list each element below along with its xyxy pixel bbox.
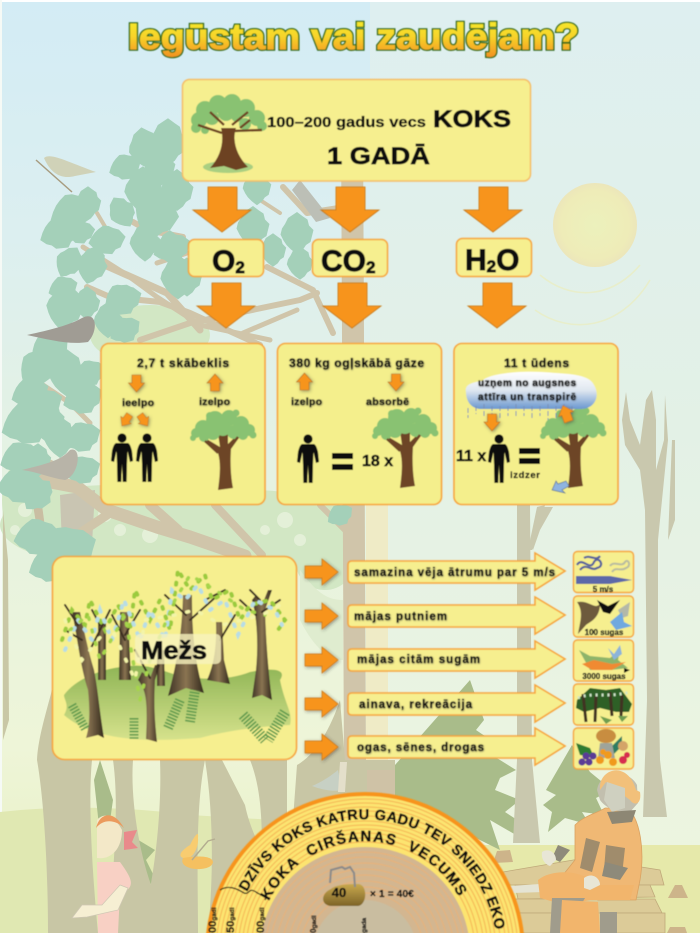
label: izelpo: izelpo xyxy=(291,396,322,408)
title: Iegūstam vai zaudējam? xyxy=(128,16,579,57)
icon: large oak tree xyxy=(191,94,267,173)
panel: water xyxy=(454,344,618,504)
birds xyxy=(22,156,96,480)
label: ieelpo: ieelpo xyxy=(122,397,154,409)
benefit arrow: forest goods: ogas, sēnes, drogas xyxy=(357,742,484,754)
panel: water: attīra un transpirē xyxy=(478,392,576,403)
age labels: 0gadi xyxy=(309,915,318,933)
tree ring diagram xyxy=(205,791,524,933)
label: Mežs xyxy=(135,634,221,665)
nuthatch xyxy=(312,770,339,791)
arrows: gases to panels xyxy=(197,283,526,328)
benefit arrow: forest goods xyxy=(348,728,565,765)
text: KOKS: KOKS xyxy=(433,106,511,133)
icon: blue arrow xyxy=(552,481,569,493)
benefit arrow: birds xyxy=(348,597,565,634)
leaves xyxy=(0,118,358,589)
back trunks forest bottom xyxy=(37,690,395,933)
right thin trunks xyxy=(513,390,675,843)
arrows: forest to benefits xyxy=(305,559,338,760)
icon: purse xyxy=(323,867,365,906)
panel: forest xyxy=(52,556,296,760)
icon: purse: 40 xyxy=(332,885,346,900)
icon box: forest goods xyxy=(574,728,634,769)
icon box: species: 3000 sugas xyxy=(582,672,626,681)
label: izdzer: izdzer xyxy=(510,470,540,481)
formula: O2: 2 xyxy=(235,258,245,277)
formula: CO2 xyxy=(312,240,388,278)
label: absorbē: absorbē xyxy=(366,396,409,408)
icon: person xyxy=(297,434,319,483)
icon: tree xyxy=(372,408,438,488)
age labels xyxy=(207,907,368,933)
age labels: 00gadi xyxy=(207,907,219,933)
formula: H2O: 2 xyxy=(487,257,496,276)
wavy marker xyxy=(220,887,266,900)
butterfly xyxy=(180,834,215,869)
leaves xyxy=(62,570,285,700)
icon box: wind: 5 m/s xyxy=(593,585,614,594)
benefit arrow: wind xyxy=(348,553,565,590)
formula: O2 xyxy=(188,240,264,278)
label: 11 x: 11 x xyxy=(456,448,486,465)
distant leaf canopy xyxy=(0,305,360,590)
text: tree age: 100–200 gadus vecs xyxy=(267,114,426,131)
text: oxygen amount: 2,7 t skābeklis xyxy=(137,356,229,370)
icon box: birds: 100 sugas xyxy=(585,628,624,637)
girl xyxy=(72,815,138,933)
formula: H2O xyxy=(456,238,532,277)
text: calculation: × 1 = 40€ xyxy=(370,889,414,900)
forester on logs xyxy=(493,770,688,933)
sun xyxy=(535,183,650,325)
benefit arrow: species: mājas citām sugām xyxy=(357,654,480,666)
formula: CO2: 2 xyxy=(366,258,375,277)
text: inner arc: KOKA CIRŠANAS VECUMS xyxy=(260,829,467,901)
benefit arrow: wind: samazina vēja ātrumu par 5 m/s xyxy=(354,567,555,579)
age labels: gada xyxy=(361,917,368,933)
icon: cloud with rain xyxy=(466,372,597,420)
benefit arrow: species xyxy=(348,641,565,678)
age labels: 00gadi xyxy=(255,907,267,933)
label: izelpo: izelpo xyxy=(199,396,230,408)
trees xyxy=(72,590,272,742)
panel: oxygen xyxy=(101,344,265,504)
equals xyxy=(519,448,540,464)
ferns xyxy=(72,690,285,740)
text: cloud caption: uzņem no augsnes xyxy=(478,378,576,389)
benefit arrow: birds: mājas putniem xyxy=(354,611,447,623)
text: CO2 amount: 380 kg ogļskābā gāze xyxy=(289,356,424,370)
benefit arrow: landscape: ainava, rekreācija xyxy=(359,699,473,711)
title: Iegūstam vai zaudējam? xyxy=(128,16,579,57)
icon: person xyxy=(488,434,510,483)
formula: CO2: CO xyxy=(321,245,366,278)
arrows: tree to gases xyxy=(193,187,522,232)
equals xyxy=(332,453,353,470)
age labels: 50gadi xyxy=(225,907,237,933)
icon: arrows xyxy=(484,403,576,431)
panel: tree in one year xyxy=(182,80,530,181)
icon: tree xyxy=(190,410,256,490)
firs xyxy=(94,680,612,895)
benefit arrow: landscape xyxy=(348,685,565,722)
text: water amount: 11 t ūdens xyxy=(504,356,569,370)
icon: arrows xyxy=(117,374,223,430)
main tree trunk and branches xyxy=(39,181,366,760)
label: Mežs: Mežs xyxy=(141,637,207,665)
text: 1 GADĀ: 1 GADĀ xyxy=(327,143,430,170)
icon box: birds xyxy=(574,596,634,637)
icon: arrows xyxy=(296,373,404,391)
text: outer arc: DZĪVS KOKS KATRU GADU TEV SNIEDZ EKO xyxy=(238,808,506,930)
formula: H2O: O xyxy=(496,244,519,277)
label: 18 x: 18 x xyxy=(362,453,393,470)
icon: two people xyxy=(111,433,158,482)
panel: carbon dioxide xyxy=(278,344,442,504)
icon box: species xyxy=(574,640,634,681)
formula: O2: O xyxy=(212,245,235,278)
icon box: landscape xyxy=(574,684,634,725)
formula: H2O: H xyxy=(465,244,487,277)
icon box: wind xyxy=(574,552,634,594)
icon: tree xyxy=(540,408,606,488)
ground xyxy=(0,808,262,933)
ground xyxy=(64,666,291,740)
